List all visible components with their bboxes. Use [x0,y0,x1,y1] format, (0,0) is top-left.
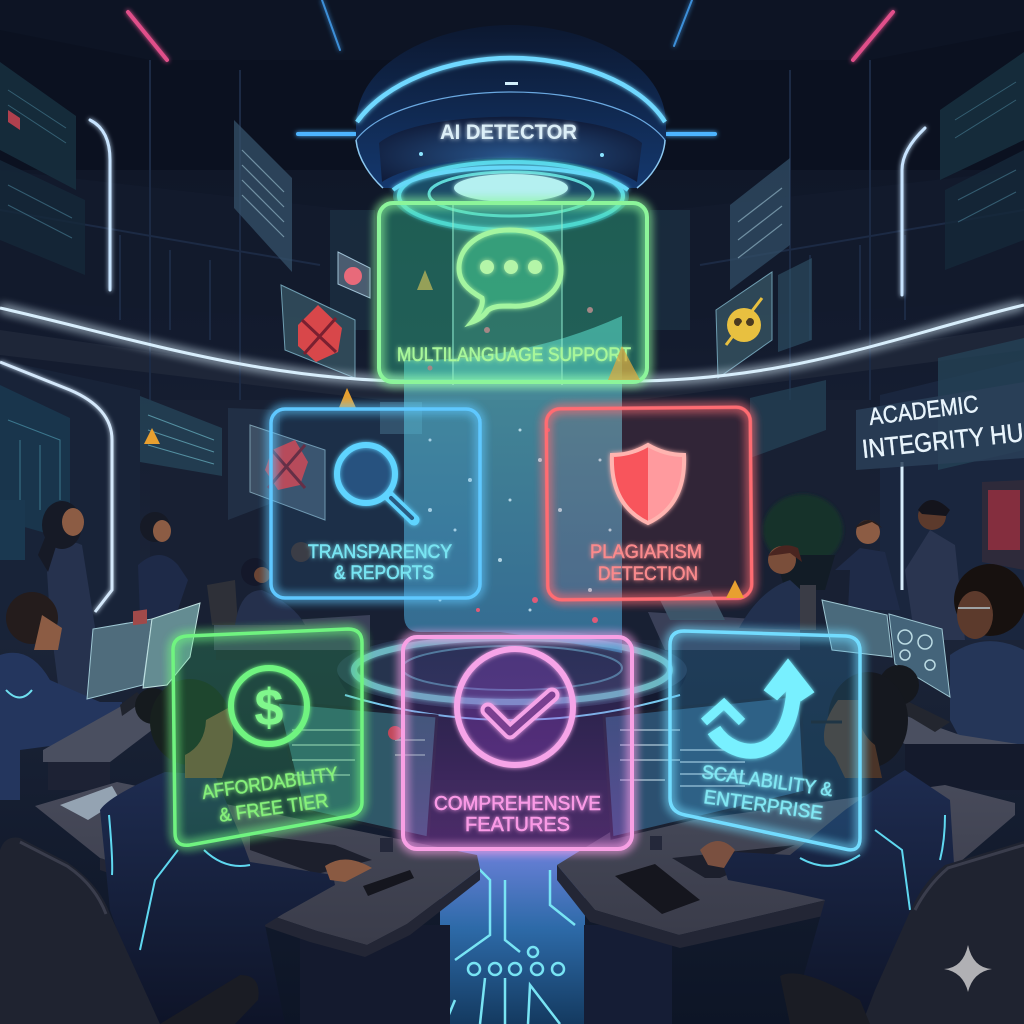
central light beam [404,205,622,653]
neon balcony band [0,305,1024,381]
seated person right rear [739,545,816,630]
chair left [0,838,259,1024]
panel: plagiarism detection: DETECTION [598,564,698,585]
warning triangle on red panel [726,580,744,598]
icon: magnifier [337,445,414,520]
foreground woman left [100,679,372,1024]
foreground woman right [700,665,955,1024]
laptops left [87,603,200,716]
panel: plagiarism detection [546,407,752,600]
background plant [763,494,843,590]
desk right rear [895,712,1024,790]
monitor right [604,695,805,850]
chair right [780,841,1024,1024]
hub title: AI DETECTOR [440,121,577,144]
foreground desk right [557,785,1015,1024]
panel: transparency and reports: & REPORTS [334,563,434,584]
panel: multilanguage support [379,203,647,382]
panel: affordability and free tier [173,629,362,845]
keyboards and phones [250,834,795,914]
panel label: TRANSPARENCY [308,542,452,563]
seated person left [0,592,122,800]
standing woman two [138,512,188,618]
back desk left [207,542,370,660]
ceiling neon accents [90,0,925,295]
central holo pedestal [337,630,687,780]
icon: dollar coin [231,668,307,744]
central hub: AI detector [356,25,666,188]
panel label: COMPREHENSIVE [434,793,601,815]
upper wall screens [0,52,1024,352]
panel: affordability and free tier: & FREE TIER [218,791,330,827]
sign: academic integrity hub: ACADEMIC [867,391,980,431]
panel label: AFFORDABILITY [201,764,340,804]
panel: comprehensive features [403,637,632,849]
warning triangle on green panel [608,346,640,380]
panel label: MULTILANGUAGE SUPPORT [397,345,631,366]
foreground desk left [35,782,480,1024]
floor circuit traces [440,850,585,1024]
bottom left floor traces [0,905,1024,1024]
panel: comprehensive features: FEATURES [465,814,570,836]
panel: scalability and enterprise [670,631,860,850]
standing woman left [38,501,97,700]
hub emitter lens [393,158,629,234]
icon: growth arrow [704,660,813,751]
desk left rear [43,690,152,790]
laptops right [822,600,950,732]
watermark sparkle [944,945,992,992]
panel label: PLAGIARISM [590,542,702,563]
back desk right [648,590,800,650]
panel: scalability and enterprise: ENTERPRISE [702,787,824,825]
icon: check circle [457,649,573,765]
standing pair right [835,500,965,640]
warning triangles [144,270,433,444]
seated person right [950,564,1024,748]
small hologram tile [338,252,370,298]
panel label: SCALABILITY & [700,762,834,801]
panel: transparency and reports [271,409,480,598]
icon: speech bubble [459,230,561,322]
sign: academic integrity hub [856,382,1024,470]
hologram: yellow skull tile right [716,272,772,378]
mid wall screens [0,338,1024,612]
hologram: red warning tile left [281,285,355,378]
icon: shield [612,445,684,523]
icon: dollar coin: $ [255,679,284,737]
monitor left [277,702,437,852]
